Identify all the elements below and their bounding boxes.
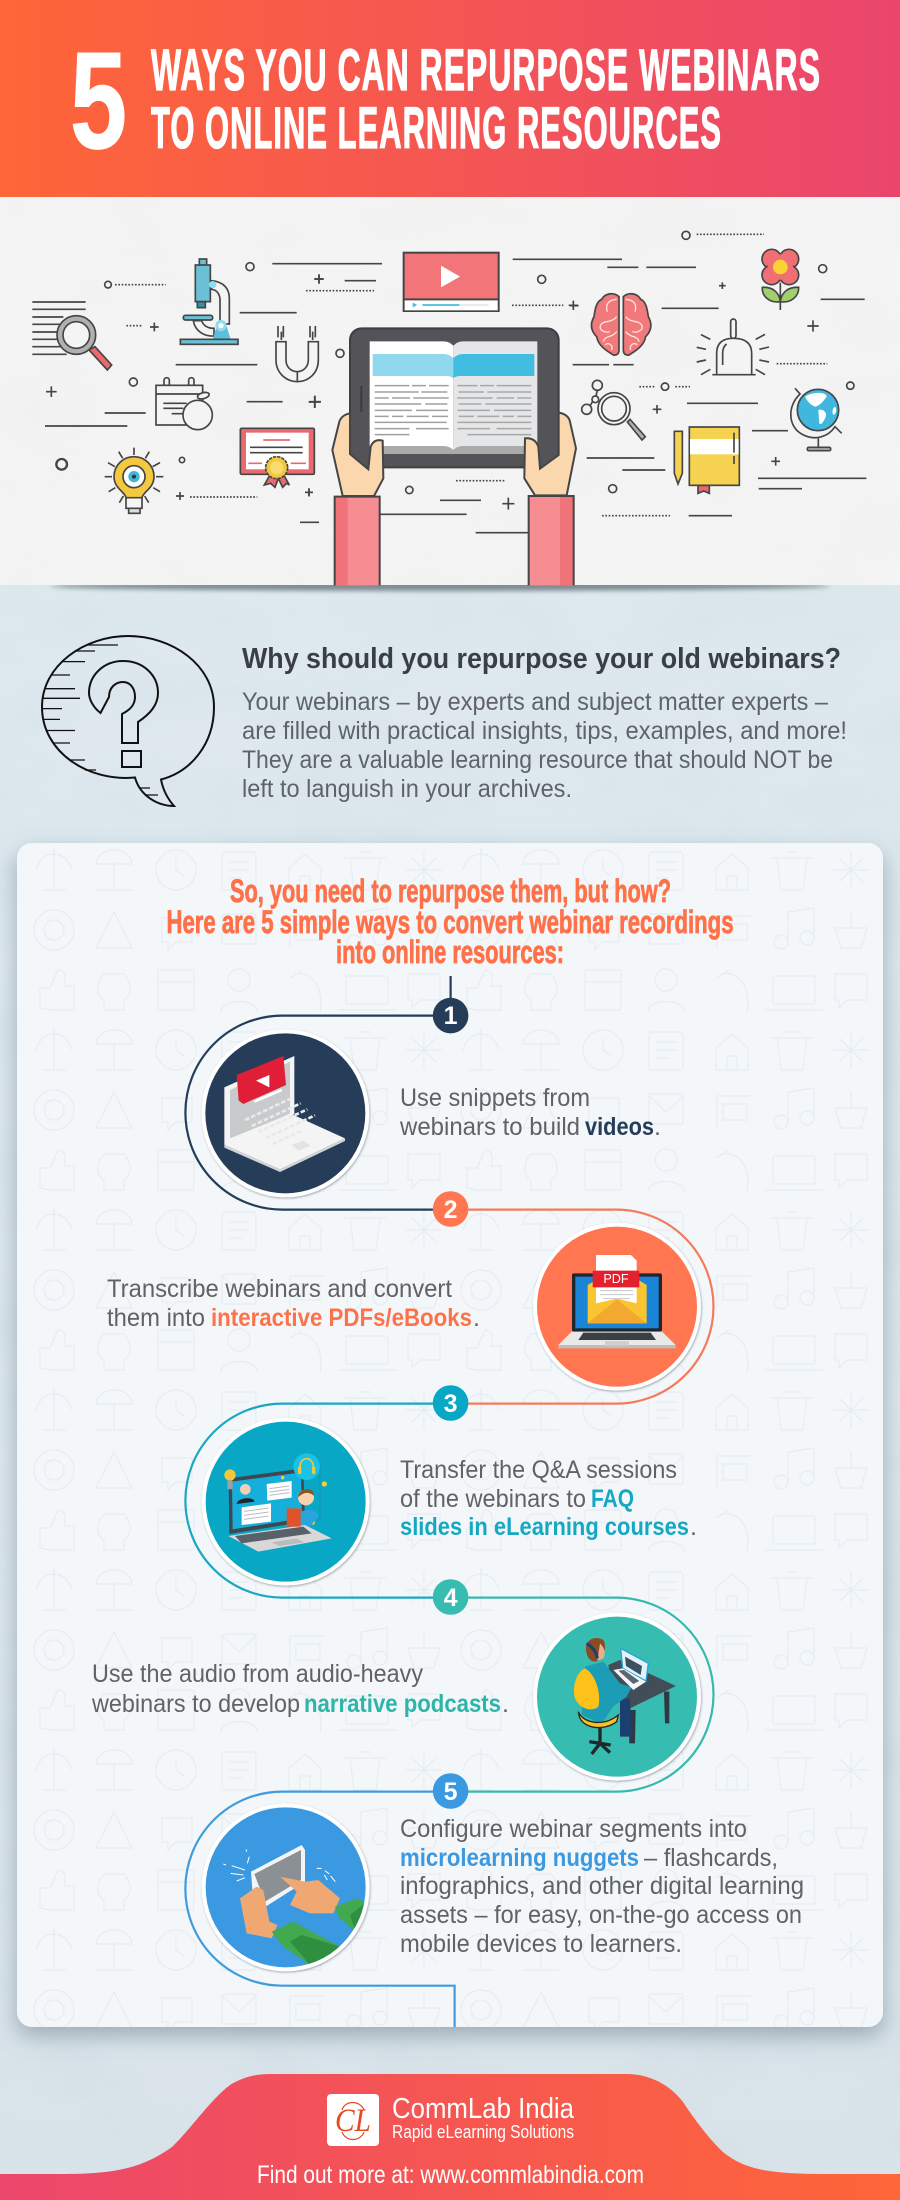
icon: step 2 laptop with pdf envelope: PDF — [603, 1272, 629, 1286]
step 3 text: Transfer the Q&A sessions — [400, 1456, 677, 1484]
why section body text — [242, 688, 847, 803]
numeral 5: 5 — [70, 24, 127, 178]
decorative lines centre — [300, 259, 622, 533]
icon: step 3 online collaboration laptop — [202, 1418, 370, 1586]
step 5 text: – flashcards, — [644, 1844, 778, 1872]
step 1 text: Use snippets from — [400, 1084, 590, 1112]
step 3 badge: 3 — [444, 1390, 458, 1418]
icon: certificate — [240, 428, 314, 487]
step 2 text: Transcribe webinars and convert — [107, 1275, 452, 1303]
step 4 badge: 4 — [444, 1584, 458, 1612]
step 3 text: . — [690, 1513, 697, 1541]
why section heading: Why should you repurpose your old webinars? — [242, 643, 841, 675]
step 2 text: interactive PDFs/eBooks — [211, 1304, 472, 1332]
step 1 badge — [433, 998, 468, 1033]
illustration: left icons — [32, 259, 382, 513]
icon: step 1 laptop with video — [201, 1029, 369, 1197]
icon: step 4 person at desk — [533, 1613, 701, 1781]
illustration bottom shadow — [50, 581, 830, 591]
icon: video player — [404, 253, 499, 311]
icon: globe — [791, 388, 842, 451]
step 1 text: videos — [585, 1113, 654, 1141]
step 3 badge — [433, 1385, 468, 1421]
footer tagline: Rapid eLearning Solutions — [392, 2122, 574, 2142]
step 4 badge — [433, 1579, 468, 1615]
illustration panel background — [0, 197, 900, 585]
footer logo — [327, 2094, 379, 2146]
why section body text: Your webinars – by experts and subject matter experts – — [242, 688, 828, 716]
illustration paper texture — [0, 197, 900, 585]
why section body text: They are a valuable learning resource that should NOT be — [242, 746, 833, 774]
step 2 text — [107, 1275, 480, 1332]
footer band — [0, 2074, 900, 2200]
card heading — [166, 873, 734, 970]
step 4 text: . — [502, 1690, 509, 1718]
footer logo: CL — [335, 2103, 371, 2139]
icon: step 2 laptop with pdf envelope — [533, 1223, 701, 1391]
step 1 text — [399, 1084, 661, 1141]
icon: bell — [697, 319, 769, 375]
panel: five ways card — [17, 843, 883, 2027]
step 5 text: Configure webinar segments into — [400, 1815, 747, 1843]
step 3 text: slides in eLearning courses — [400, 1513, 689, 1541]
step 2 text: them into — [107, 1304, 205, 1332]
icon: notebook — [689, 427, 739, 493]
step 2 badge — [433, 1191, 468, 1227]
step 5 text: infographics, and other digital learning — [400, 1872, 804, 1900]
step 2 text: . — [473, 1304, 480, 1332]
card heading: So, you need to repurpose them, but how? — [230, 873, 671, 909]
step 5 badge: 5 — [444, 1778, 458, 1806]
step 4 text: narrative podcasts — [304, 1690, 501, 1718]
step 5 text: mobile devices to learners. — [400, 1930, 682, 1958]
icon: magnet — [276, 326, 318, 382]
illustration: centre tablet and hands — [300, 253, 622, 585]
background paper texture — [0, 585, 900, 2200]
step 4 text: webinars to develop — [91, 1690, 300, 1718]
step 4 text — [91, 1660, 509, 1718]
icon: magnifier — [57, 316, 112, 370]
why section body text: left to languish in your archives. — [242, 775, 572, 803]
timeline connector — [185, 976, 714, 2027]
why section body text: are filled with practical insights, tips, examples, and more! — [242, 717, 847, 745]
decorative lines left — [32, 263, 382, 500]
icon: step 5 hands with tablet — [202, 1803, 370, 1971]
illustration: right icons — [570, 231, 866, 516]
step 1 text: . — [654, 1113, 661, 1141]
faint icon pattern — [17, 843, 883, 2027]
icon: microscope — [180, 259, 238, 344]
step 5 text: microlearning nuggets — [400, 1844, 639, 1872]
step 3 text — [400, 1456, 697, 1541]
step 1 badge: 1 — [444, 1002, 458, 1030]
step 5 text: assets – for easy, on-the-go access on — [400, 1901, 802, 1929]
icon: tablet with open book — [350, 328, 559, 467]
icon: magnifier with molecule — [582, 380, 645, 440]
book text lines left page — [375, 386, 449, 435]
icon: flower — [762, 249, 799, 310]
icon: calendar with apple — [156, 378, 212, 430]
icon: pencil — [674, 431, 682, 484]
why section question bubble icon — [42, 636, 214, 806]
step 2 badge: 2 — [444, 1196, 458, 1224]
icon: light bulb with eye — [105, 448, 163, 513]
step 5 text — [400, 1815, 804, 1958]
decorative lines right — [570, 231, 866, 516]
icon: left hand — [332, 413, 383, 496]
card heading: into online resources: — [336, 934, 564, 970]
step 3 text: FAQ — [591, 1485, 634, 1513]
footer call to action: Find out more at: www.commlabindia.com — [257, 2161, 644, 2189]
title — [151, 38, 821, 161]
step 5 badge — [433, 1773, 468, 1809]
icon: left sleeve — [335, 497, 380, 585]
page background — [0, 585, 900, 2200]
header banner — [0, 0, 900, 197]
icon: brain — [591, 294, 651, 355]
book text lines right page — [457, 386, 531, 435]
icon: right hand — [524, 413, 576, 495]
step 4 text: Use the audio from audio-heavy — [92, 1660, 423, 1688]
footer company name: CommLab India — [392, 2093, 575, 2125]
step 3 text: of the webinars to — [400, 1485, 586, 1513]
icon: right sleeve — [529, 496, 574, 585]
step 1 text: webinars to build — [399, 1113, 580, 1141]
